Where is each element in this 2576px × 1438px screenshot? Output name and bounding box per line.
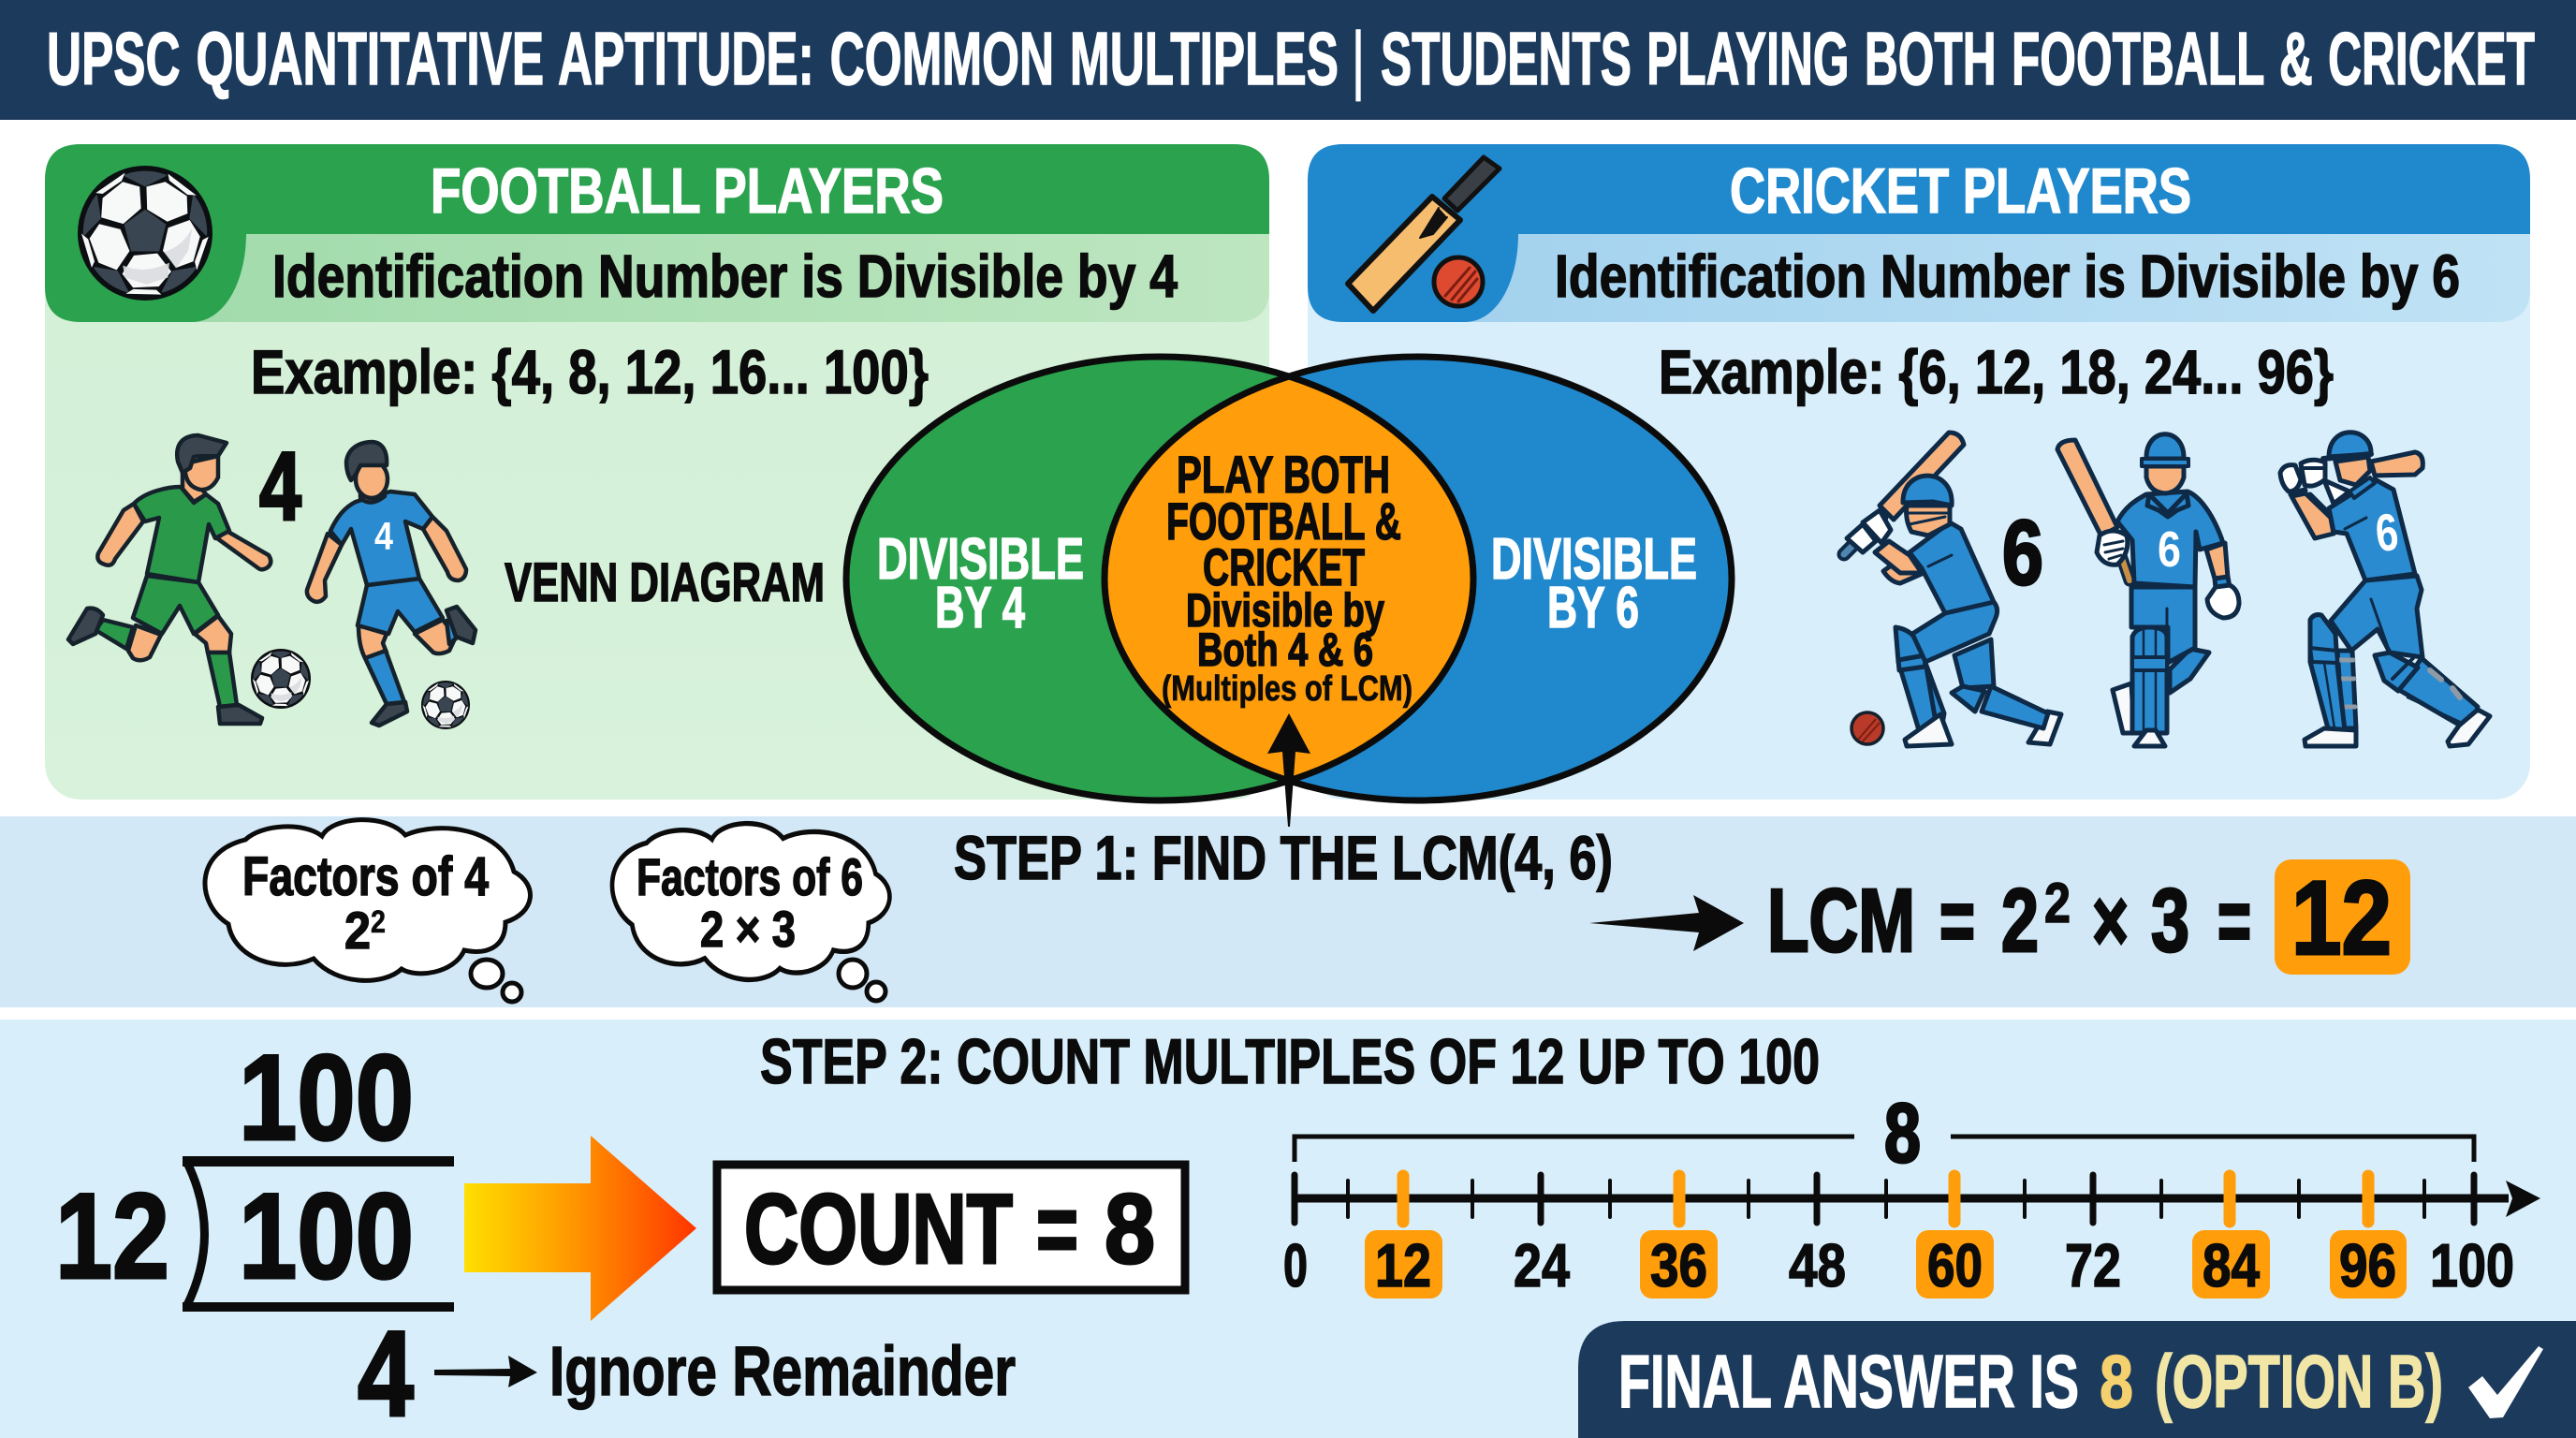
final answer banner: (OPTION B) [2155,1340,2443,1423]
venn intersection label: (Multiples of LCM) [1162,669,1412,709]
big number 6: 6 [2002,501,2043,604]
LCM formula [1767,859,2410,976]
venn intersection label: FOOTBALL & [1166,492,1401,550]
jersey number 6, centre batter: 6 [2158,521,2181,578]
title: | [1354,17,1363,101]
number line labels: 96 [2339,1231,2396,1299]
number line labels: 60 [1927,1231,1983,1299]
long division: 12 [55,1167,169,1304]
cricket panel heading: CRICKET PLAYERS [1730,155,2191,227]
football rule: Identification Number is Divisible by 4 [272,242,1178,310]
venn intersection label [1162,445,1412,709]
number line labels: 84 [2203,1231,2260,1299]
count box [717,1165,1185,1290]
bracket with count 8: 8 [1884,1087,1921,1181]
icon: small football 2 [417,681,473,734]
count box: COUNT [744,1174,1013,1284]
thought bubble: factors of 6: Factors of 6 [637,847,863,906]
count box: 8 [1105,1174,1155,1284]
football example: Example: {4, 8, 12, 16... 100} [251,337,929,406]
venn intersection label: PLAY BOTH [1177,445,1390,504]
venn intersection label: Divisible by [1186,584,1384,637]
icon: small football 1 [246,649,315,714]
player: footballer in green [68,435,271,724]
title: UPSC QUANTITATIVE APTITUDE: COMMON MULTIPLES [47,17,1339,100]
icon: cricket ball near batter [1852,712,1883,744]
LCM formula: = [2217,871,2251,971]
venn intersection label: Both 4 & 6 [1197,624,1373,676]
venn diagram label: VENN DIAGRAM [505,552,825,613]
player: batter side on [2280,433,2490,746]
panel: cricket players [1308,144,2530,800]
LCM formula: 3 [2151,871,2189,971]
thought bubble: factors of 6 [612,824,889,1001]
number line labels [1283,1230,2514,1299]
LCM formula: 2 [2044,872,2071,934]
LCM formula: = [1939,871,1975,971]
arrow: LCM step up to intersection [1267,713,1310,827]
thought bubble: factors of 4: Factors of 4 [242,846,489,907]
long division: 100 [239,1167,414,1304]
long division [55,1029,454,1438]
thought bubble: factors of 4: 2 [371,904,386,940]
band: step 1 background [0,816,2576,1007]
LCM formula: LCM [1767,871,1915,971]
thought bubble: factors of 4: 2 [344,901,371,960]
header bar [0,0,2576,120]
number line labels: 12 [1375,1231,1431,1299]
venn right label: BY 6 [1547,576,1639,640]
jersey number 6, right batter: 6 [2373,502,2401,563]
thought bubble: factors of 6: 2 × 3 [700,902,796,958]
venn right label: DIVISIBLE [1491,527,1697,592]
icon: check mark [2468,1346,2543,1418]
final answer banner: FINAL ANSWER IS [1618,1340,2079,1423]
venn diagram [846,357,1732,800]
number line labels: 100 [2430,1231,2514,1299]
icon: cricket bat and ball [1348,157,1500,311]
arrow: to LCM result [1589,895,1744,951]
player: footballer in blue [307,442,476,726]
number line labels: 0 [1283,1231,1308,1299]
bracket with count 8 [1295,1087,2474,1181]
LCM formula: × [2092,871,2129,971]
arrow: remainder [434,1356,537,1387]
count box: = [1036,1174,1078,1284]
final answer banner: 8 [2100,1340,2133,1423]
venn intersection label: CRICKET [1203,537,1365,596]
number line labels: 36 [1650,1231,1707,1299]
football panel heading: FOOTBALL PLAYERS [431,155,944,227]
player: batter forward defence [1844,433,2061,746]
long division: 100 [239,1029,414,1166]
venn left label [877,527,1084,640]
venn left label: BY 4 [935,576,1025,640]
LCM formula: 2 [2001,871,2039,971]
thought bubble: factors of 4 [205,820,530,1002]
step 2 heading: STEP 2: COUNT MULTIPLES OF 12 UP TO 100 [760,1026,1820,1097]
venn left label: DIVISIBLE [877,527,1084,592]
long division: 4 [358,1305,414,1438]
big number 4: 4 [259,433,301,541]
icon: football [67,165,220,314]
number line [1283,1087,2540,1299]
jersey number 4: 4 [374,514,394,558]
band: step 2 background [0,1020,2576,1438]
final answer banner [1578,1321,2576,1438]
number line labels: 48 [1789,1231,1846,1299]
ignore remainder note: Ignore Remainder [549,1332,1016,1410]
player: batter standing [2057,434,2239,746]
step 1 heading: STEP 1: FIND THE LCM(4, 6) [954,823,1613,892]
panel: football players [45,144,1269,800]
number line labels: 24 [1514,1231,1570,1299]
venn right label [1491,527,1697,640]
LCM result box: 12 [2291,859,2392,976]
cricket example: Example: {6, 12, 18, 24... 96} [1659,337,2334,406]
number line labels: 72 [2065,1231,2121,1299]
arrow: gradient to count [464,1136,696,1321]
